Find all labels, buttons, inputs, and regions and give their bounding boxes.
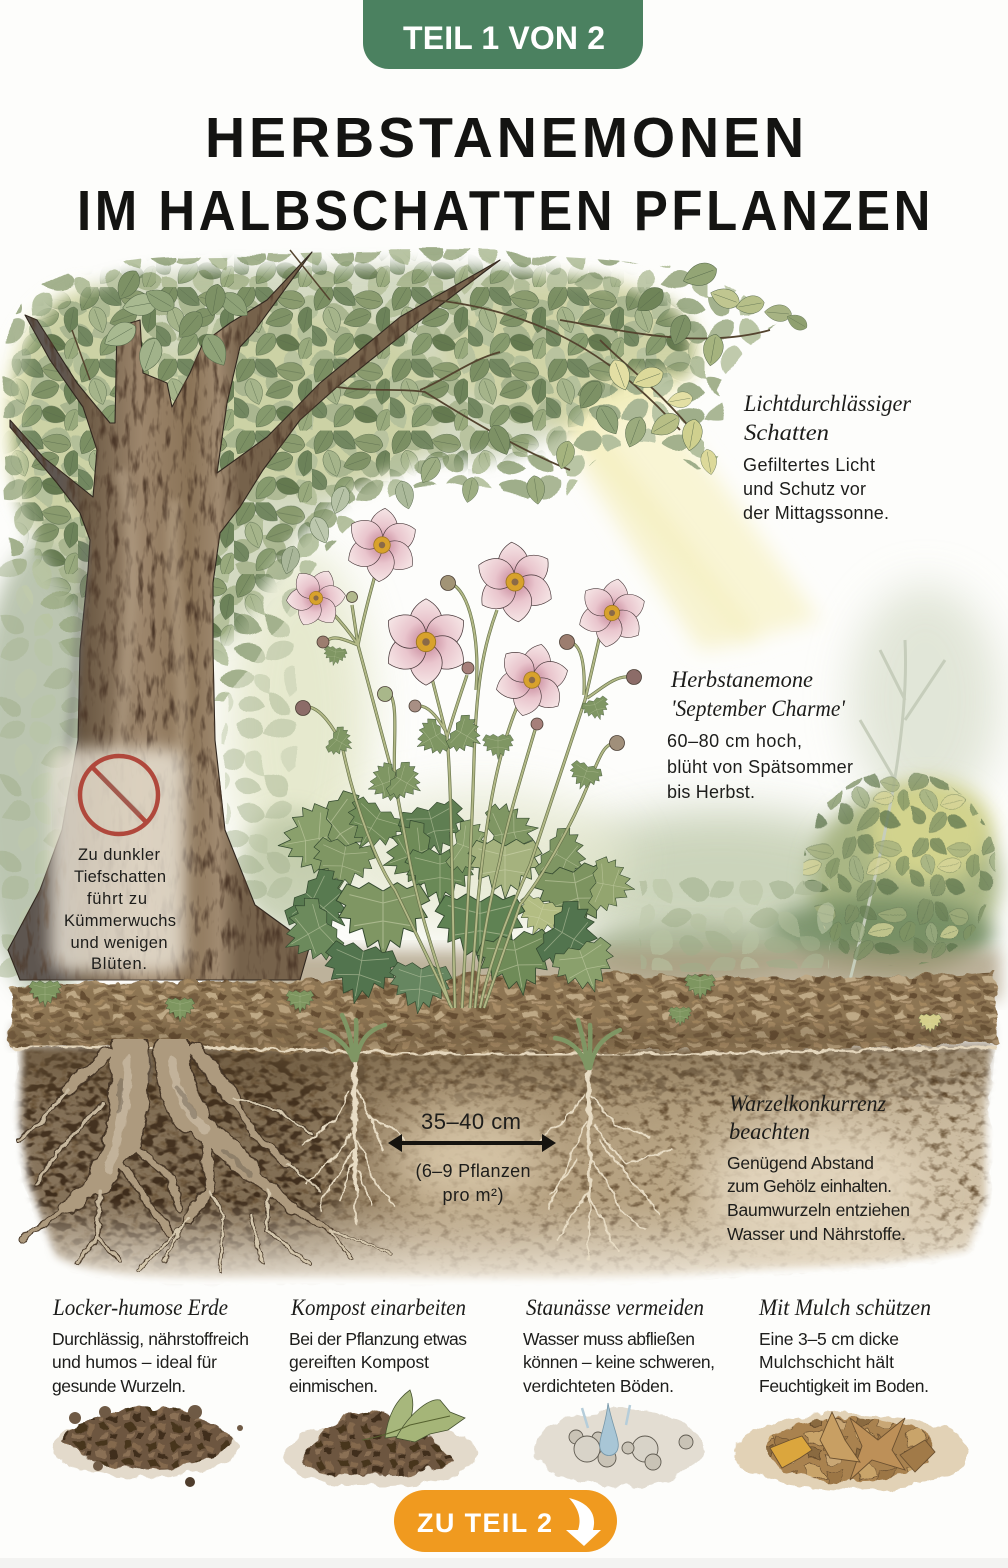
note: root competition: Baumwurzeln entziehen — [727, 1200, 910, 1220]
arrow: spacing — [388, 1134, 556, 1152]
callout text — [64, 846, 176, 973]
tip: mulch: Eine 3–5 cm dicke — [759, 1329, 899, 1349]
stems — [305, 555, 630, 1008]
callout text: Tiefschatten — [74, 868, 166, 886]
tip: loose soil — [52, 1295, 249, 1487]
tip: loose soil: Locker-humose Erde — [52, 1295, 228, 1320]
spacing measurement: 35–40 cm — [421, 1109, 521, 1134]
title — [77, 106, 934, 243]
tip: compost: gereiften Kompost — [289, 1352, 429, 1372]
tip: no waterlogging: Wasser muss abfließen — [523, 1329, 695, 1349]
tip: compost: Kompost einarbeiten — [290, 1295, 466, 1320]
tip: compost: einmischen. — [289, 1376, 378, 1396]
icon: leaf mulch — [734, 1412, 970, 1490]
callout text: Kümmerwuchs — [64, 912, 176, 930]
tip: mulch: Mit Mulch schützen — [758, 1295, 931, 1320]
note: root competition: Genügend Abstand — [727, 1153, 874, 1173]
button: to part 2 — [394, 1490, 617, 1552]
callout text: Zu dunkler — [78, 846, 160, 864]
no-sign callout: too dark — [50, 748, 186, 973]
tree roots — [18, 1050, 393, 1270]
tip: no waterlogging: verdichteten Böden. — [523, 1376, 674, 1396]
buds — [296, 576, 642, 750]
icon: stones and drop — [535, 1403, 705, 1486]
note: root competition: Wasser und Nährstoffe. — [727, 1224, 906, 1244]
tip: compost — [282, 1295, 478, 1487]
tip: loose soil: gesunde Wurzeln. — [52, 1376, 186, 1396]
tree canopy — [0, 247, 776, 702]
note: light shade: Schatten — [744, 420, 829, 445]
tip: mulch — [734, 1295, 970, 1490]
icon: soil pile — [53, 1405, 243, 1487]
note: light shade: und Schutz vor — [743, 479, 866, 499]
icon: compost with leaf — [282, 1390, 478, 1487]
title: IM HALBSCHATTEN PFLANZEN — [77, 179, 934, 243]
icon: prohibition sign — [80, 756, 158, 834]
note: variety — [667, 667, 853, 802]
tip: compost: Bei der Pflanzung etwas — [289, 1329, 467, 1349]
note: variety: blüht von Spätsommer — [667, 757, 853, 777]
icon: curved arrow — [566, 1498, 601, 1546]
flowers — [275, 505, 654, 726]
note: root competition: zum Gehölz einhalten. — [727, 1176, 892, 1196]
tip: mulch: Feuchtigkeit im Boden. — [759, 1376, 929, 1396]
note: root competition — [727, 1091, 910, 1244]
sun rays — [530, 385, 820, 650]
banner: Teil 1 von 2 — [363, 0, 643, 69]
plants per m2: pro m²) — [442, 1185, 504, 1205]
tip: no waterlogging — [523, 1295, 715, 1486]
stem highlight — [305, 555, 630, 1008]
note: light shade: der Mittagssonne. — [743, 503, 889, 523]
banner: Teil 1 von 2: TEIL 1 VON 2 — [403, 20, 605, 56]
illustration: background vegetation — [0, 540, 1000, 1000]
anemone plant — [269, 505, 654, 1016]
anemone roots — [302, 1062, 672, 1258]
foreground leaves on branches — [99, 259, 810, 576]
button: to part 2: ZU TEIL 2 — [417, 1508, 552, 1538]
callout text: und wenigen — [70, 934, 168, 952]
note: root competition: beachten — [729, 1119, 810, 1144]
note: variety: bis Herbst. — [667, 782, 755, 802]
tree trunk and branches — [8, 250, 770, 980]
note: light shade — [743, 391, 912, 523]
root outlines — [18, 1050, 393, 1270]
root fills — [18, 1050, 393, 1270]
callout text: führt zu — [87, 890, 147, 908]
tip: mulch: Mulchschicht hält — [759, 1352, 894, 1372]
plants per m2 — [416, 1161, 530, 1205]
ground seedlings — [29, 974, 942, 1033]
tip: loose soil: und humos – ideal für — [52, 1352, 217, 1372]
note: light shade: Gefiltertes Licht — [743, 455, 875, 475]
foliage rosette — [269, 784, 640, 1016]
callout text: Blüten. — [91, 955, 147, 973]
tip: no waterlogging: Staunässe vermeiden — [526, 1295, 704, 1320]
note: light shade: Lichtdurchlässiger — [743, 391, 912, 416]
anemone root sprouts — [320, 1015, 620, 1068]
tip: no waterlogging: können – keine schweren, — [523, 1352, 715, 1372]
tip: loose soil: Durchlässig, nährstoffreich — [52, 1329, 249, 1349]
note: variety: 'September Charme' — [671, 696, 846, 721]
mulch layer — [8, 972, 998, 1055]
spacing measurement — [388, 1109, 556, 1205]
note: variety: Herbstanemone — [670, 667, 813, 692]
plants per m2: (6–9 Pflanzen — [416, 1161, 530, 1181]
title: HERBSTANEMONEN — [205, 106, 808, 170]
footer strip — [0, 1558, 1008, 1568]
note: root competition: Warzelkonkurrenz — [729, 1091, 886, 1116]
note: variety: 60–80 cm hoch, — [667, 731, 802, 751]
stem leaves — [322, 645, 613, 808]
soil cross-section — [0, 1025, 996, 1285]
